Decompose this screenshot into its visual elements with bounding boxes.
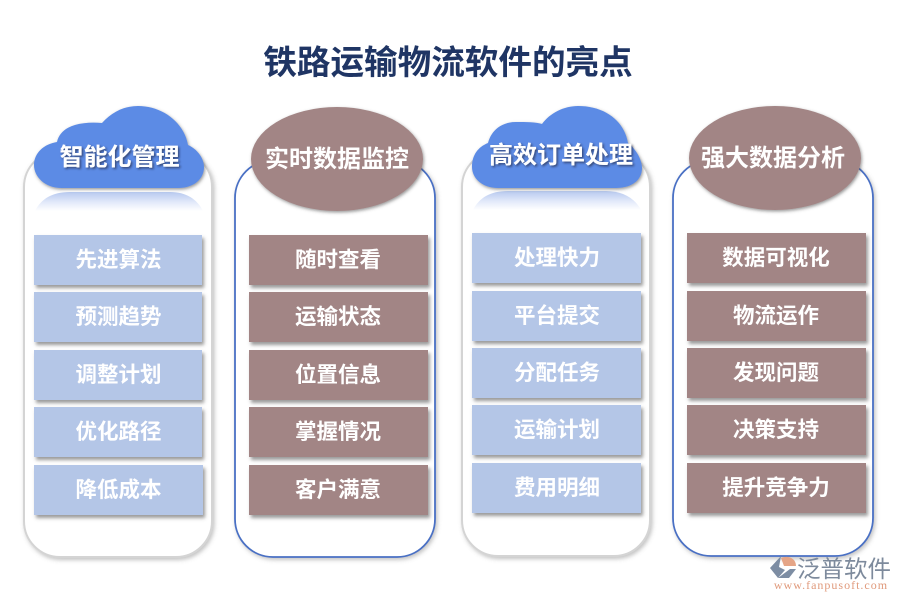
item: 决策支持: 决策支持: [733, 418, 819, 442]
panel 1 cloud reflection: [35, 192, 203, 211]
item: 费用明细: 费用明细: [514, 476, 600, 500]
panel: 智能化管理: [24, 106, 212, 557]
item: 调整计划: [34, 350, 202, 400]
panel 4 heading: 强大数据分析: [701, 145, 845, 172]
item: 运输状态: [249, 292, 428, 342]
item: 数据可视化: [687, 233, 866, 283]
item: 运输计划: 运输计划: [514, 418, 600, 442]
item: 发现问题: [687, 348, 866, 398]
panel 2 ellipse: [251, 107, 423, 211]
item: 随时查看: 随时查看: [295, 248, 381, 272]
item: 掌握情况: [249, 407, 428, 457]
item: 优化路径: [34, 407, 202, 457]
item: 随时查看: [249, 235, 428, 285]
item: 客户满意: [249, 465, 428, 515]
logo: 泛普软件: [770, 556, 891, 592]
item: 降低成本: [34, 465, 203, 515]
item: 先进算法: [34, 235, 202, 285]
item: 运输状态: 运输状态: [295, 304, 381, 329]
item: 预测趋势: 预测趋势: [75, 305, 162, 329]
logo name: 泛普软件: [797, 556, 891, 582]
panel 2 frame: [235, 160, 435, 557]
logo url: www.fanpusoft.com: [774, 578, 888, 592]
item: 平台提交: 平台提交: [514, 303, 600, 328]
item: 平台提交: [472, 291, 641, 341]
panel 3 heading: 高效订单处理: [489, 142, 633, 169]
panel 1 heading: 智能化管理: [60, 144, 180, 171]
panel 3 cloud reflection: [473, 191, 641, 210]
panel 4 ellipse: [689, 106, 861, 210]
panel 1 cloud: [34, 106, 204, 188]
item: 提升竞争力: [687, 463, 866, 513]
panel 4 frame: [673, 160, 873, 556]
panel 3 frame: [462, 151, 650, 556]
panel 2 heading: 实时数据监控: [265, 146, 409, 173]
item: 数据可视化: 数据可视化: [722, 246, 830, 270]
item: 分配任务: [472, 348, 641, 398]
panel 1 frame: [24, 151, 212, 557]
panel: 实时数据监控: [235, 107, 435, 557]
item: 优化路径: 优化路径: [75, 420, 162, 444]
item: 客户满意: 客户满意: [295, 477, 381, 502]
item: 提升竞争力: 提升竞争力: [722, 476, 830, 500]
item: 发现问题: 发现问题: [733, 361, 819, 385]
item: 掌握情况: 掌握情况: [295, 420, 381, 444]
item: 位置信息: [249, 350, 428, 400]
item: 运输计划: [472, 405, 641, 455]
item: 位置信息: 位置信息: [295, 362, 381, 387]
panel: 高效订单处理: [462, 106, 650, 556]
item: 分配任务: 分配任务: [514, 361, 600, 385]
item: 降低成本: 降低成本: [75, 478, 162, 502]
item: 处理快力: [472, 233, 641, 283]
item: 费用明细: [472, 463, 641, 513]
item: 物流运作: 物流运作: [733, 304, 819, 328]
title: 铁路运输物流软件的亮点: [263, 44, 633, 82]
item: 物流运作: [687, 291, 866, 341]
icon: logo mark: [770, 556, 796, 578]
item: 处理快力: 处理快力: [514, 246, 600, 270]
panel 3 cloud: [472, 106, 642, 188]
item: 决策支持: [687, 405, 866, 455]
item: 预测趋势: [34, 292, 202, 342]
item: 调整计划: 调整计划: [75, 363, 162, 387]
item: 先进算法: 先进算法: [75, 248, 162, 272]
panel: 强大数据分析: [673, 106, 873, 556]
